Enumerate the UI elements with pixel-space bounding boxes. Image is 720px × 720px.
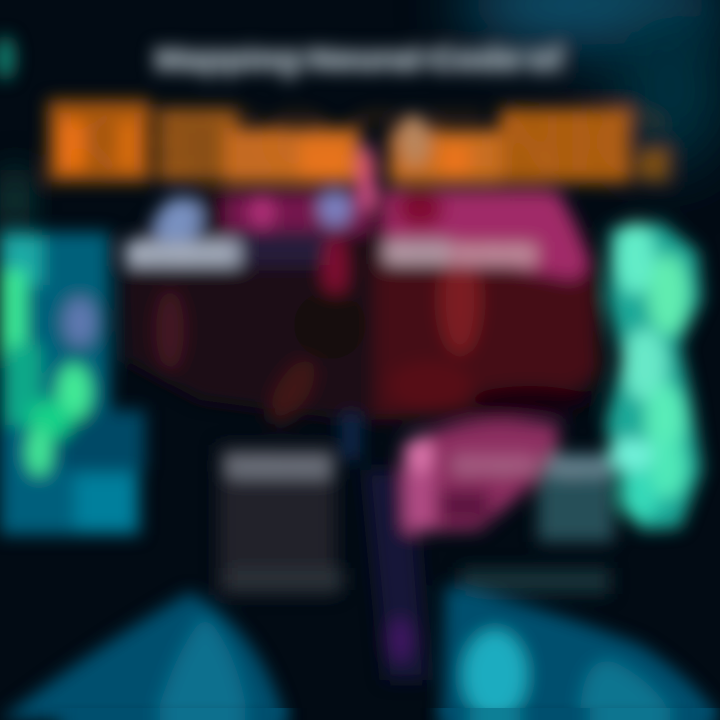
background glows bbox=[0, 0, 720, 230]
lower center panel: dark card: Ketones bbox=[226, 456, 330, 478]
bottom edge strip bbox=[60, 708, 712, 720]
lower center panel: dark card bbox=[218, 445, 343, 595]
brain labels bbox=[125, 240, 538, 266]
right panel: mint glowing column bbox=[605, 222, 702, 530]
central stem bbox=[342, 415, 428, 680]
title: highlighted word: KETOGENIC bbox=[50, 92, 670, 191]
left panel: green and teal cards bbox=[0, 232, 145, 535]
brain labels: Neural Activity bbox=[385, 244, 536, 266]
brain labels: Metabolic bbox=[127, 244, 237, 266]
title: upper line: Mapping Neural Code of bbox=[153, 39, 564, 80]
bottom: blue neural waves bbox=[0, 585, 720, 720]
lower right panel: pink card: Synapse Signal bbox=[450, 456, 610, 478]
illustration: brain bbox=[122, 144, 600, 431]
lower right panel: pink card bbox=[402, 420, 614, 594]
